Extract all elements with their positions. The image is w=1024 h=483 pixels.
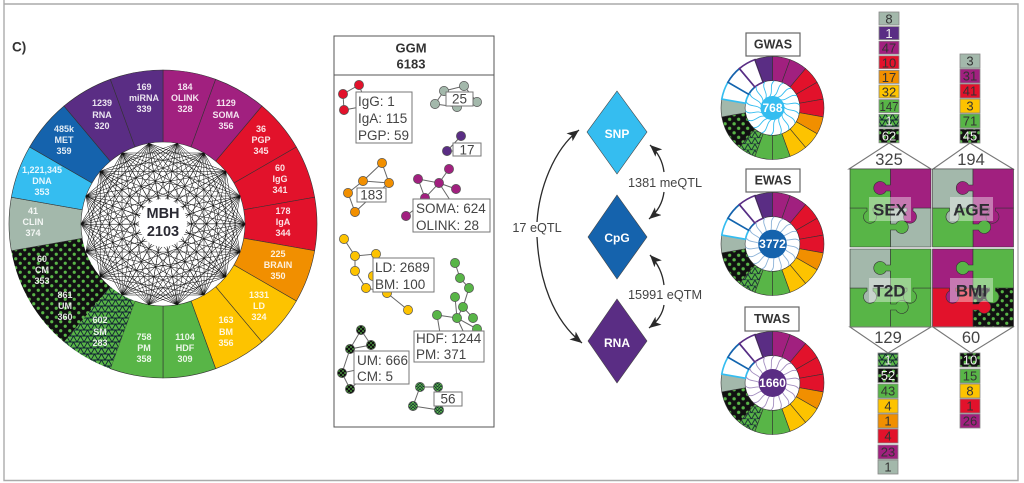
segment: IgA [239, 197, 324, 262]
segment: SM: SM [93, 327, 107, 337]
segment: LD [203, 263, 296, 347]
cluster: red immunoglobulins: PGP: 59 [358, 128, 409, 142]
cluster: orange: 183 [360, 188, 383, 202]
panel: TWAS donut [719, 307, 826, 437]
cluster: purple SOMA OLINK [401, 164, 490, 232]
segment: UM and CM: 861 [57, 290, 73, 300]
segment: miRNA: 169 [136, 82, 152, 92]
stack: BMI associations [960, 352, 980, 428]
stack: T2D associations [878, 352, 898, 474]
segment: PGP: PGP [251, 135, 271, 145]
segment: BRAIN: 225 [270, 249, 286, 259]
pointer: 325 [849, 143, 931, 169]
pointer: 194 [933, 143, 1013, 169]
segment: PM [110, 301, 163, 378]
stack: SEX associations: 1 [885, 26, 893, 41]
stack: T2D associations: 4 [884, 428, 892, 444]
stack: T2D associations: 43 [881, 384, 895, 398]
EWAS title: EWAS [755, 174, 791, 188]
segment: PM: 358 [136, 354, 152, 364]
pointer: 129: 129 [874, 329, 902, 347]
stack: BMI associations: 26 [963, 414, 977, 428]
segment: miRNA: miRNA [129, 93, 159, 103]
segment: DNA [11, 145, 96, 211]
stack: SEX associations: 147 [880, 99, 898, 114]
segment: SM: 602 [92, 315, 108, 325]
segment: SOMA: SOMA [212, 110, 240, 120]
segment: LD: 324 [251, 312, 267, 322]
segment: OLINK: 328 [177, 104, 193, 114]
EWAS ring: 3772 [759, 237, 786, 251]
segment: CLIN [2, 186, 87, 251]
stack: SEX associations: 62 [882, 128, 896, 144]
segment: UM and CM: 360 [57, 312, 73, 322]
segment: RNA: RNA [92, 110, 112, 120]
stack: AGE associations [960, 54, 980, 144]
segment: BM [172, 283, 262, 376]
panel: QTL diagram [512, 91, 702, 383]
cluster: red immunoglobulins: IgA: 115 [358, 110, 407, 126]
stack: T2D associations: 1 [884, 414, 892, 428]
stack: T2D associations: 4 [884, 398, 892, 414]
stack: SEX associations [879, 12, 899, 144]
diamond: CpG: CpG [604, 231, 630, 245]
stack: T2D associations: 1 [884, 352, 892, 368]
segment: RNA: 320 [94, 121, 110, 131]
center label: MBH 2103 [139, 199, 187, 247]
segment: IgG [230, 147, 323, 231]
segment: UM and CM: CM [35, 265, 49, 275]
segment: HDF: 1104 [175, 332, 195, 342]
cluster: yellow LD BM [339, 234, 434, 315]
panel: GGM [334, 36, 494, 427]
segment: OLINK: 184 [177, 82, 193, 92]
puzzle: T2D: T2D [873, 282, 906, 300]
segment: MET [30, 101, 123, 185]
segment: MET: MET [54, 135, 74, 145]
segment: OLINK: OLINK [171, 93, 199, 103]
segment: IgA: 344 [275, 228, 291, 238]
pointer: 129 [850, 327, 931, 353]
stack: BMI associations: 1 [966, 398, 974, 414]
segment: BM: 356 [218, 338, 234, 348]
segment: UM and CM: 60 [37, 254, 47, 264]
stack: SEX associations: 1 [885, 114, 893, 128]
panel: GWAS donut [719, 33, 826, 162]
segment: BRAIN: BRAIN [264, 260, 292, 270]
segment: MET: 485k [54, 124, 75, 134]
segment: BM: 163 [218, 315, 234, 325]
stack: AGE associations: 45 [963, 128, 977, 144]
segment: PGP: 36 [256, 124, 266, 134]
cluster: SM: 56 [440, 392, 456, 406]
cluster: yellow LD BM: LD: 2689 [375, 260, 430, 274]
puzzle: BMI [932, 249, 1014, 327]
arrow: SNP to CpG [649, 145, 664, 219]
stack: SEX associations: 10 [882, 56, 896, 70]
stack: T2D associations: 1 [884, 460, 892, 474]
GWAS title: GWAS [754, 38, 792, 52]
stack: BMI associations: 10 [963, 352, 977, 368]
segment: miRNA [110, 61, 186, 152]
cluster: UM CM [337, 325, 409, 394]
segment: OLINK [163, 70, 216, 147]
cluster: purple SOMA OLINK: OLINK: 28 [416, 218, 479, 232]
segment: IgA: 178 [275, 206, 291, 216]
segment: RNA: 1239 [92, 98, 112, 108]
stack: AGE associations: 31 [963, 68, 977, 84]
segment: UM and CM [11, 238, 110, 342]
cluster: orange [343, 158, 394, 217]
cluster: red immunoglobulins [338, 80, 412, 143]
segment: LD: LD [253, 301, 265, 311]
diamond: SNP: SNP [605, 127, 629, 141]
segment: SM [64, 287, 135, 369]
diamond: CpG [588, 195, 647, 279]
GWAS ring: 768 [762, 101, 783, 115]
center label: MBH 2103: MBH [146, 206, 180, 222]
panel: MBH donut [2, 61, 324, 387]
segment: RNA [64, 72, 154, 165]
cluster: purple SOMA OLINK: SOMA: 624 [416, 200, 486, 216]
segment: BRAIN: 350 [270, 271, 286, 281]
pointer: 60 [933, 327, 1013, 353]
segment: MET: 359 [56, 146, 72, 156]
segment: PGP [213, 106, 302, 199]
segment: IgG: 60 [275, 163, 285, 173]
puzzle: SEX: SEX [873, 200, 908, 220]
segment: IgG: 341 [272, 185, 288, 195]
segment: HDF [140, 296, 216, 387]
label: 1381 meQTL: 1381 meQTL [628, 176, 702, 190]
segment: BM: BM [219, 327, 233, 337]
segment: DNA: 353 [34, 187, 50, 197]
cluster: UM CM: UM: 666 [357, 352, 408, 368]
segment: SOMA: 356 [218, 121, 234, 131]
segment: SOMA [189, 79, 265, 170]
segment: CLIN: 374 [25, 228, 41, 238]
segment: BRAIN [230, 237, 315, 303]
segment: UM and CM: UM [58, 301, 72, 311]
stack: AGE associations: 71 [963, 114, 977, 128]
stack: AGE associations: 41 [963, 84, 977, 98]
segment: PM: PM [137, 343, 151, 353]
stack: AGE associations: 3 [966, 54, 974, 68]
segment: PM: 758 [136, 332, 152, 342]
segment: IgG: IgG [272, 174, 288, 184]
segment: DNA: 1,221,345 [22, 165, 62, 175]
puzzle: BMI: BMI [956, 282, 987, 300]
panel label: C): C) [12, 40, 26, 54]
GGM heading: 6183 [397, 56, 425, 72]
TWAS title: TWAS [754, 312, 790, 326]
puzzle: AGE [932, 169, 1014, 247]
pointer: 325: 325 [875, 151, 903, 169]
puzzle: T2D [850, 249, 931, 327]
center label: MBH 2103: 2103 [147, 224, 179, 240]
segment: DNA: DNA [32, 176, 52, 186]
segment: PGP: 345 [253, 146, 269, 156]
segment: LD: 1331 [249, 290, 269, 300]
stack: BMI associations: 8 [966, 384, 974, 398]
cluster: grey CLIN [430, 81, 482, 112]
TWAS ring: 1660 [759, 376, 786, 390]
segment: SM: 283 [92, 338, 108, 348]
segment: CLIN: 41 [28, 206, 38, 216]
diamond: SNP [587, 91, 647, 174]
stack: AGE associations: 3 [966, 98, 974, 114]
cluster: green HDF PM [414, 258, 484, 362]
GGM heading: GGM [395, 40, 427, 56]
cluster: green HDF PM: PM: 371 [416, 346, 466, 362]
stack: SEX associations: 47 [882, 40, 896, 56]
segment: IgA: IgA [276, 217, 291, 227]
cluster: dark purple [442, 131, 481, 158]
pointer: 194: 194 [957, 151, 985, 169]
diamond: RNA: RNA [604, 336, 630, 350]
stack: SEX associations: 32 [882, 84, 896, 100]
pointer: 60: 60 [962, 329, 980, 347]
GGM frame [334, 36, 494, 427]
diamond: RNA [588, 299, 647, 383]
panel: EWAS donut [719, 169, 826, 298]
segment: CLIN: CLIN [22, 217, 44, 227]
stack: T2D associations: 23 [881, 444, 895, 460]
label: 17 eQTL: 17 eQTL [512, 221, 562, 235]
cluster: dark purple: 17 [459, 142, 475, 158]
network chords [48, 109, 278, 339]
stack: T2D associations: 52 [881, 368, 895, 383]
cluster: red immunoglobulins: IgG: 1 [358, 94, 395, 108]
segment: SOMA: 1129 [216, 98, 236, 108]
label: 15991 eQTM: 15991 eQTM [628, 288, 702, 302]
arrow: CpG to RNA [649, 255, 664, 328]
stack: SEX associations: 8 [885, 12, 893, 26]
arrow: SNP to RNA [537, 130, 582, 343]
segment: miRNA: 339 [136, 104, 152, 114]
cluster: UM CM: CM: 5 [357, 368, 393, 384]
cluster: green HDF PM: HDF: 1244 [416, 330, 482, 346]
GGM heading [395, 40, 427, 72]
cluster: yellow LD BM: BM: 100 [375, 276, 425, 292]
stack: SEX associations: 17 [882, 70, 896, 85]
cluster: grey CLIN: 25 [452, 92, 467, 106]
puzzle: AGE: AGE [953, 200, 990, 220]
segment: HDF: HDF [176, 343, 195, 353]
segment: HDF: 309 [177, 354, 193, 364]
cluster: SM [408, 382, 462, 415]
segment: UM and CM: 353 [34, 276, 50, 286]
puzzle: SEX [850, 169, 931, 247]
stack: BMI associations: 15 [963, 368, 977, 384]
